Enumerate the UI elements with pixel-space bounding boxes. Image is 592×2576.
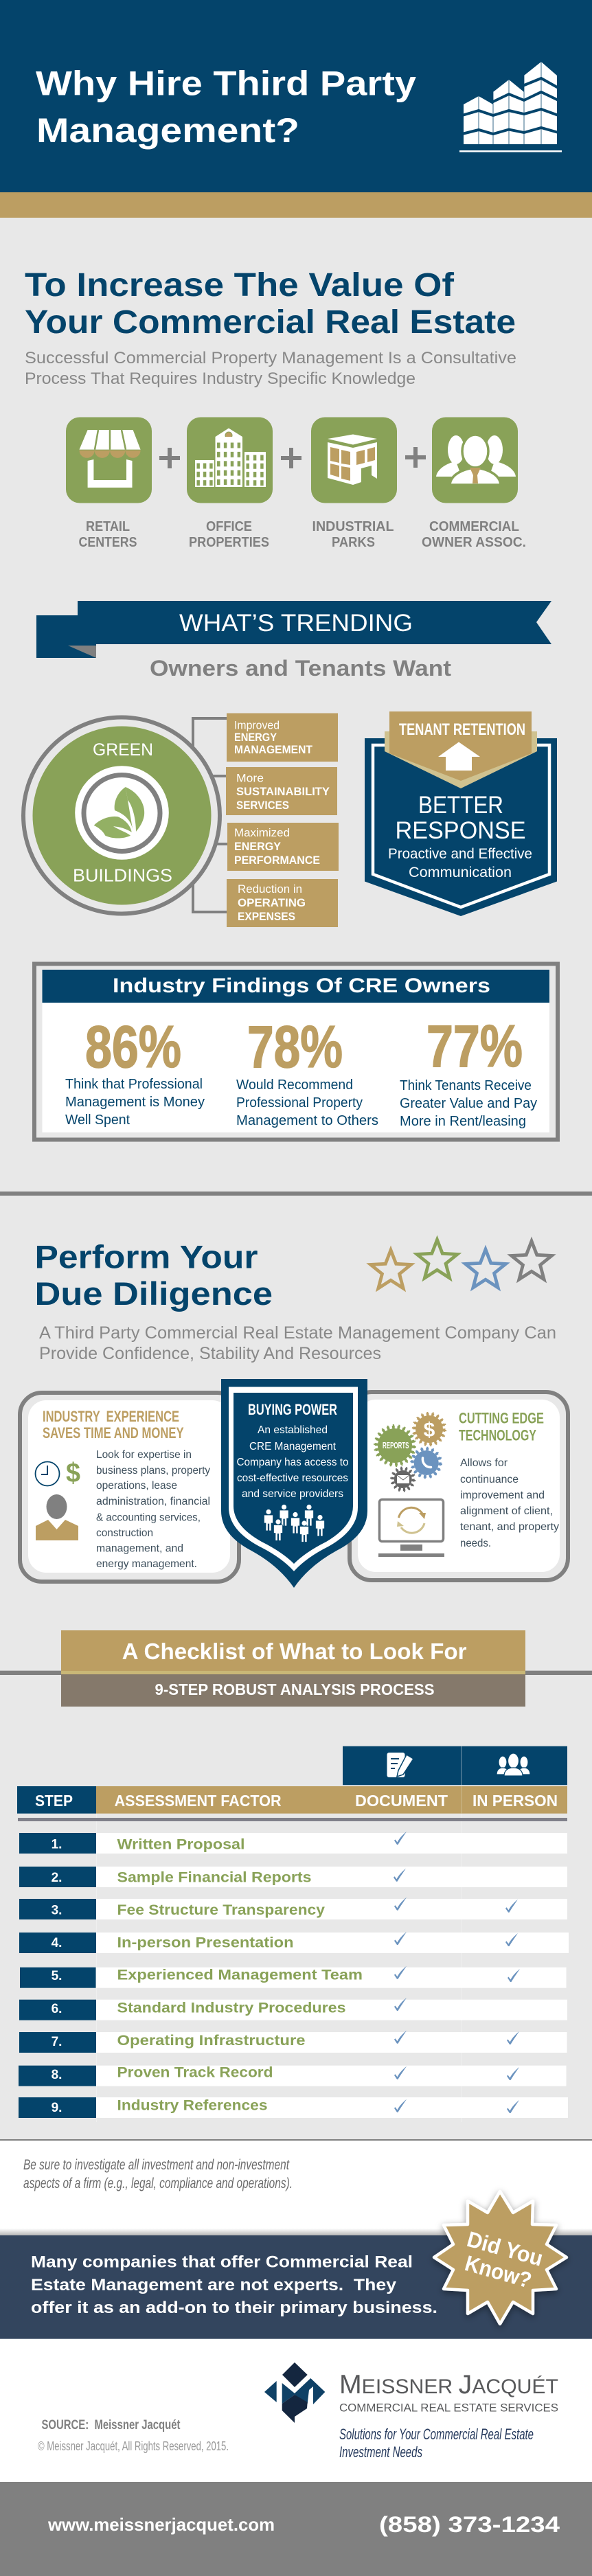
- diagram: green circle: BUILDINGS: [73, 865, 172, 886]
- text: allows for: alignment of client,: [460, 1505, 553, 1517]
- logo: meissner jacquet: MEISSNER JACQUÉT: [339, 2370, 558, 2400]
- icon: commercial owner association: [432, 418, 518, 503]
- text: better response: BETTER: [418, 792, 503, 819]
- text: better response: Communication: [409, 865, 512, 880]
- box: maximized energy performance: PERFORMANCE: [234, 854, 320, 867]
- icon: monitor: [378, 1500, 444, 1557]
- row 7: [19, 2031, 567, 2053]
- stat: 78%: Management to Others: [236, 1113, 378, 1128]
- row 9: Industry References: [117, 2098, 268, 2114]
- text: allows for: tenant, and property: [460, 1521, 559, 1533]
- stat: 86%: Well Spent: [65, 1113, 130, 1128]
- panel: tenant retention shield: [365, 711, 557, 916]
- box: maximized energy performance: [227, 823, 339, 871]
- panel: did you know: [0, 2191, 592, 2339]
- labels: property types: RETAIL: [86, 519, 130, 534]
- title: [36, 65, 416, 150]
- heading: increase value: Your Commercial Real Estate: [25, 304, 516, 341]
- panel: did you know: Estate Management are not experts. They: [31, 2276, 397, 2294]
- banner: checklist: A Checklist of What to Look For: [122, 1639, 467, 1664]
- table head: STEP: [35, 1792, 73, 1810]
- labels: property types: OWNER ASSOC.: [422, 535, 526, 550]
- panel: header: [0, 0, 592, 218]
- connectors: [193, 718, 227, 912]
- row 9: 9.: [52, 2101, 62, 2115]
- heading: perform your due diligence: Due Diligence: [34, 1275, 273, 1312]
- text: expertise: construction: [96, 1527, 153, 1539]
- heading: increase value: [25, 267, 516, 341]
- icon: document: [387, 1753, 413, 1777]
- box: maximized energy performance: Maximized: [234, 827, 290, 839]
- icon: gears: $: [424, 1419, 435, 1441]
- box: more sustainability services: [226, 767, 337, 815]
- labels: property types: PARKS: [332, 535, 375, 550]
- icon: clock: [36, 1461, 59, 1486]
- box: more sustainability services: SUSTAINABILITY: [236, 786, 330, 798]
- row 2: [19, 1867, 567, 1887]
- icon: retail centers: [66, 418, 152, 503]
- row 4: [19, 1932, 569, 1953]
- text: expertise: operations, lease: [96, 1480, 177, 1492]
- stat: 78%: [236, 1014, 378, 1128]
- icon: up arrow: [438, 742, 480, 771]
- heading: increase value: To Increase The Value Of: [25, 267, 455, 304]
- icon: office properties: [187, 418, 273, 503]
- stat: 77%: More in Rent/leasing: [400, 1114, 526, 1129]
- table head: DOCUMENT: [355, 1792, 448, 1810]
- row 9: [19, 2097, 568, 2118]
- stat: 78%: Would Recommend: [236, 1078, 353, 1093]
- icon: people group: [264, 1505, 324, 1542]
- row 8: [19, 2065, 566, 2086]
- text: expertise: [96, 1449, 210, 1570]
- table head: ASSESSMENT FACTOR: [115, 1792, 282, 1810]
- box: reduction in operating expenses: Reduction in: [238, 883, 302, 896]
- row 7: 7.: [52, 2035, 62, 2049]
- text: allows for: needs.: [460, 1538, 491, 1549]
- panel: cutting edge technology: [350, 1392, 568, 1580]
- icon: plus: [405, 447, 426, 468]
- logo: meissner jacquet: COMMERCIAL REAL ESTATE SERVICES: [339, 2402, 558, 2415]
- panel: buying power shield: Company has access to: [236, 1457, 349, 1468]
- text: subhead: Successful Commercial Property Management Is a Consultative: [25, 349, 516, 367]
- icon: dollar: $: [66, 1458, 80, 1488]
- row 6: Standard Industry Procedures: [117, 2001, 346, 2016]
- badge: starburst: Did You: [464, 2226, 546, 2271]
- icon: industrial parks: [311, 418, 397, 503]
- panel: cutting edge technology: TECHNOLOGY: [459, 1427, 536, 1444]
- text: investigate note: [23, 2157, 293, 2191]
- text: investigate note: Be sure to investigate all investment and non-investment: [23, 2157, 290, 2173]
- row 8: 8.: [52, 2068, 62, 2082]
- stat: 77%: Greater Value and Pay: [400, 1096, 537, 1111]
- panel: did you know: offer it as an add-on to their primary business.: [31, 2299, 437, 2317]
- labels: property types: [78, 519, 526, 550]
- text: better response: RESPONSE: [396, 817, 526, 844]
- labels: property types: INDUSTRIAL: [312, 519, 394, 534]
- footer bar: www.meissnerjacquet.com: [47, 2514, 275, 2535]
- text: expertise: & accounting services,: [96, 1512, 201, 1523]
- heading: perform your due diligence: Perform Your: [34, 1239, 258, 1275]
- text: allows for: [460, 1457, 559, 1549]
- panel: buying power shield: cost-effective resources: [237, 1472, 348, 1484]
- diagram: green circle: [23, 717, 220, 913]
- panel: industry experience: INDUSTRY EXPERIENCE: [43, 1408, 179, 1425]
- box: improved energy management: MANAGEMENT: [234, 744, 312, 756]
- panel: did you know: Many companies that offer Commercial Real: [31, 2253, 413, 2272]
- text: expertise: business plans, property: [96, 1465, 210, 1477]
- panel: buying power shield: and service providers: [242, 1488, 343, 1500]
- text: subhead: [25, 349, 516, 388]
- box: improved energy management: Improved: [234, 720, 280, 732]
- stat: 77%: 77%: [426, 1014, 523, 1080]
- banner: checklist: 9-STEP ROBUST ANALYSIS PROCESS: [155, 1680, 434, 1698]
- icon: plus: [281, 448, 301, 468]
- panel: industry experience: SAVES TIME AND MONEY: [43, 1424, 184, 1441]
- badge: starburst: [434, 2191, 567, 2324]
- row 5: [20, 1966, 566, 1988]
- stat: 86%: [65, 1014, 205, 1128]
- text: third party intro: A Third Party Commercial Real Estate Management Company Can: [39, 1323, 556, 1343]
- icon: plus: [159, 448, 180, 468]
- panel: buying power shield: [221, 1379, 367, 1588]
- box: more sustainability services: SERVICES: [236, 799, 289, 812]
- panel: buying power shield: BUYING POWER: [248, 1401, 337, 1418]
- text: source: © Meissner Jacquét, All Rights Reserved, 2015.: [38, 2439, 229, 2453]
- stat: 86%: 86%: [85, 1014, 181, 1080]
- panel: industry findings: [34, 964, 558, 1140]
- diagram: green circle: GREEN: [93, 740, 153, 760]
- title: Why Hire Third Party: [36, 65, 416, 103]
- row 4: 4.: [52, 1936, 62, 1950]
- stat: 77%: [400, 1014, 537, 1129]
- icon: leaf: [94, 787, 144, 838]
- icon: buildings: [459, 62, 562, 152]
- text: allows for: continuance: [460, 1474, 519, 1485]
- footer bar: (858) 373-1234: [379, 2512, 560, 2537]
- row 1: Written Proposal: [117, 1837, 244, 1853]
- heading: perform your due diligence: [34, 1239, 273, 1312]
- text: source: [38, 2418, 229, 2453]
- text: subhead: Process That Requires Industry Specific Knowledge: [25, 369, 415, 388]
- panel: property types: [66, 418, 526, 550]
- banner: checklist: [61, 1630, 525, 1707]
- row 2: Sample Financial Reports: [117, 1870, 312, 1886]
- logo: meissner jacquet: Investment Needs: [339, 2443, 422, 2461]
- heading: owners and tenants want: Owners and Tenants Want: [150, 656, 451, 681]
- title: Management?: [36, 111, 299, 150]
- text: source: SOURCE: Meissner Jacquét: [41, 2418, 181, 2432]
- row 7: Operating Infrastructure: [117, 2033, 305, 2049]
- icon: gears: REPORTS: [383, 1440, 409, 1450]
- box: reduction in operating expenses: EXPENSES: [238, 911, 295, 923]
- box: improved energy management: [227, 713, 338, 762]
- panel: tenant retention shield: TENANT RETENTION: [399, 720, 525, 739]
- row 5: Experienced Management Team: [117, 1968, 363, 1983]
- labels: property types: COMMERCIAL: [429, 519, 519, 534]
- footer bar: [0, 2482, 592, 2576]
- icon: people: [497, 1753, 530, 1776]
- text: allows for: Allows for: [460, 1457, 508, 1469]
- panel: green buildings: [23, 713, 339, 927]
- box: reduction in operating expenses: OPERATING: [238, 897, 306, 909]
- box: more sustainability services: More: [236, 772, 264, 784]
- panel: buying power shield: CRE Management: [249, 1441, 337, 1452]
- box: maximized energy performance: ENERGY: [234, 841, 281, 853]
- row 3: 3.: [52, 1904, 62, 1918]
- badge: starburst: Know?: [462, 2250, 534, 2293]
- stat: 86%: Management is Money: [65, 1095, 205, 1110]
- text: third party intro: Provide Confidence, Stability And Resources: [39, 1344, 381, 1363]
- stat: 78%: Professional Property: [236, 1095, 363, 1110]
- labels: property types: OFFICE: [206, 519, 252, 534]
- table: checklist: [17, 1746, 569, 2122]
- text: investigate note: aspects of a firm (e.g., legal, compliance and operations).: [23, 2176, 293, 2191]
- icon: stars: [371, 1240, 551, 1288]
- stat: 78%: 78%: [247, 1014, 343, 1080]
- logo: meissner jacquet: [264, 2362, 558, 2461]
- text: better response: [388, 792, 532, 880]
- text: expertise: management, and: [96, 1542, 183, 1555]
- text: expertise: energy management.: [96, 1558, 197, 1570]
- text: third party intro: [39, 1323, 556, 1363]
- icon: person: [36, 1494, 78, 1540]
- panel: industry findings: Industry Findings Of CRE Owners: [113, 974, 490, 997]
- row 1: 1.: [52, 1838, 62, 1852]
- row 3: [19, 1897, 567, 1919]
- stat: 77%: Think Tenants Receive: [400, 1078, 532, 1093]
- row 2: 2.: [52, 1871, 62, 1885]
- table head: IN PERSON: [473, 1792, 558, 1810]
- row 1: [19, 1832, 567, 1854]
- panel: industry experience: [20, 1393, 239, 1582]
- icon: gears: [374, 1413, 446, 1492]
- row 8: Proven Track Record: [117, 2065, 273, 2081]
- text: better response: Proactive and Effective: [388, 846, 532, 862]
- text: allows for: improvement and: [460, 1490, 545, 1501]
- row 6: [19, 1998, 567, 2020]
- panel: buying power shield: An established: [258, 1424, 328, 1436]
- row 4: In-person Presentation: [117, 1935, 294, 1951]
- box: improved energy management: ENERGY: [234, 731, 277, 744]
- banner: what's trending: [36, 601, 551, 658]
- row 3: Fee Structure Transparency: [117, 1902, 325, 1918]
- box: reduction in operating expenses: [227, 879, 338, 927]
- table head: [17, 1746, 567, 1821]
- labels: property types: CENTERS: [78, 535, 137, 550]
- text: expertise: administration, financial: [96, 1496, 210, 1507]
- labels: property types: PROPERTIES: [189, 535, 269, 550]
- row 6: 6.: [52, 2002, 62, 2016]
- panel: cutting edge technology: CUTTING EDGE: [459, 1409, 544, 1427]
- row 5: 5.: [52, 1969, 62, 1983]
- text: expertise: Look for expertise in: [96, 1449, 192, 1461]
- banner: what's trending: WHAT’S TRENDING: [179, 610, 413, 637]
- stat: 86%: Think that Professional: [65, 1077, 203, 1092]
